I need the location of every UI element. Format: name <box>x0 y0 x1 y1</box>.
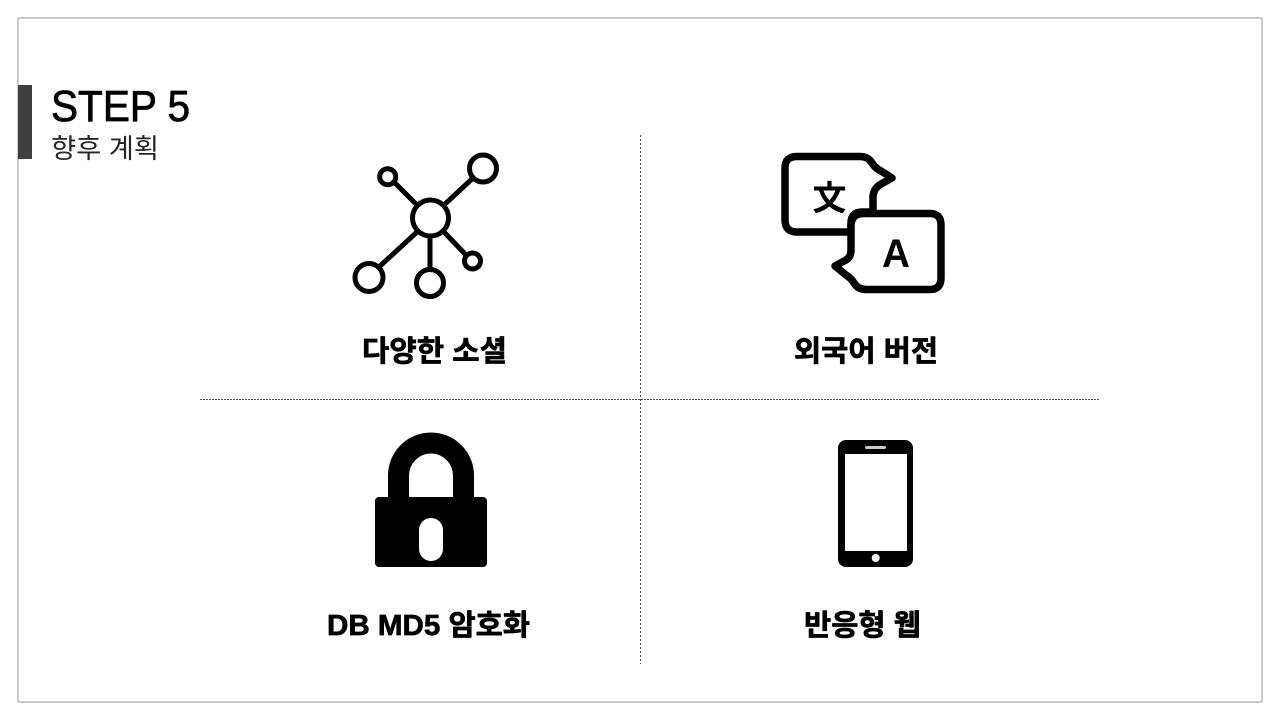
label: 다양한 소셜: 다양한 소셜 <box>362 335 507 368</box>
icon: smartphone <box>838 440 913 567</box>
label: 반응형 웹: 반응형 웹 <box>804 609 921 642</box>
label: 외국어 버전: 외국어 버전 <box>794 335 938 368</box>
subheading: 향후 계획: 향후 계획 <box>51 134 159 164</box>
icon: translation speech bubbles: 文 <box>812 180 846 218</box>
panel: various social <box>355 155 507 368</box>
icon: network nodes <box>355 155 496 296</box>
panel: responsive web <box>804 440 921 642</box>
icon: translation speech bubbles: A <box>882 232 910 276</box>
panel: foreign language version <box>785 156 941 368</box>
icon: padlock <box>375 443 487 567</box>
icon: translation speech bubbles <box>785 156 941 290</box>
heading accent bar <box>18 85 32 159</box>
label: DB MD5 암호화: DB MD5 암호화 <box>327 609 530 642</box>
heading: STEP 5: STEP 5 <box>51 82 190 131</box>
panel: DB MD5 encryption <box>327 443 530 642</box>
